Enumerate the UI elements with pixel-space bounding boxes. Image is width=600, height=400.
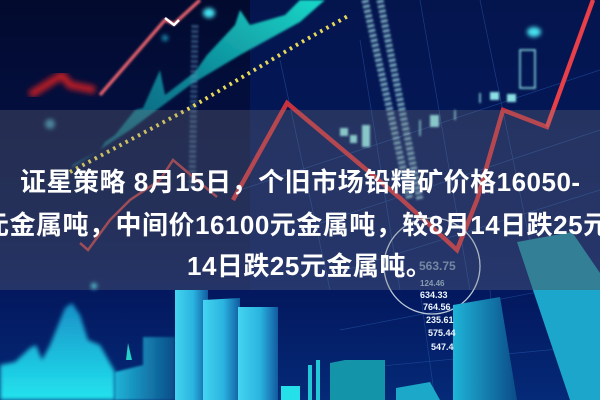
bar chart xyxy=(0,232,600,400)
caption line 1: 证星策略 8月15日，个旧市场铅精矿价格16050- xyxy=(20,167,581,197)
data digits xyxy=(420,290,456,352)
teal bar silhouette xyxy=(72,0,325,168)
data digits: 764.56 xyxy=(423,302,451,312)
data digits: 547.4 xyxy=(431,342,454,352)
data digits: 235.61 xyxy=(426,315,454,325)
caption text xyxy=(0,167,600,281)
main red zigzag line xyxy=(80,0,593,250)
cyan glows xyxy=(45,8,541,289)
translucent caption band xyxy=(0,110,600,290)
background: financial chart illustration: 563.75 xyxy=(419,259,456,273)
yellow dashed trend line xyxy=(70,16,348,172)
magnifier ring xyxy=(384,218,480,314)
vertical number column xyxy=(192,0,420,200)
background: financial chart illustration: 124.46 xyxy=(420,279,445,288)
caption line 3: 14日跌25元金属吨。 xyxy=(187,251,432,281)
data digits: 575.44 xyxy=(428,328,456,338)
left red trend line xyxy=(30,0,200,95)
data digits: 634.33 xyxy=(420,290,448,300)
candlesticks xyxy=(340,50,535,147)
